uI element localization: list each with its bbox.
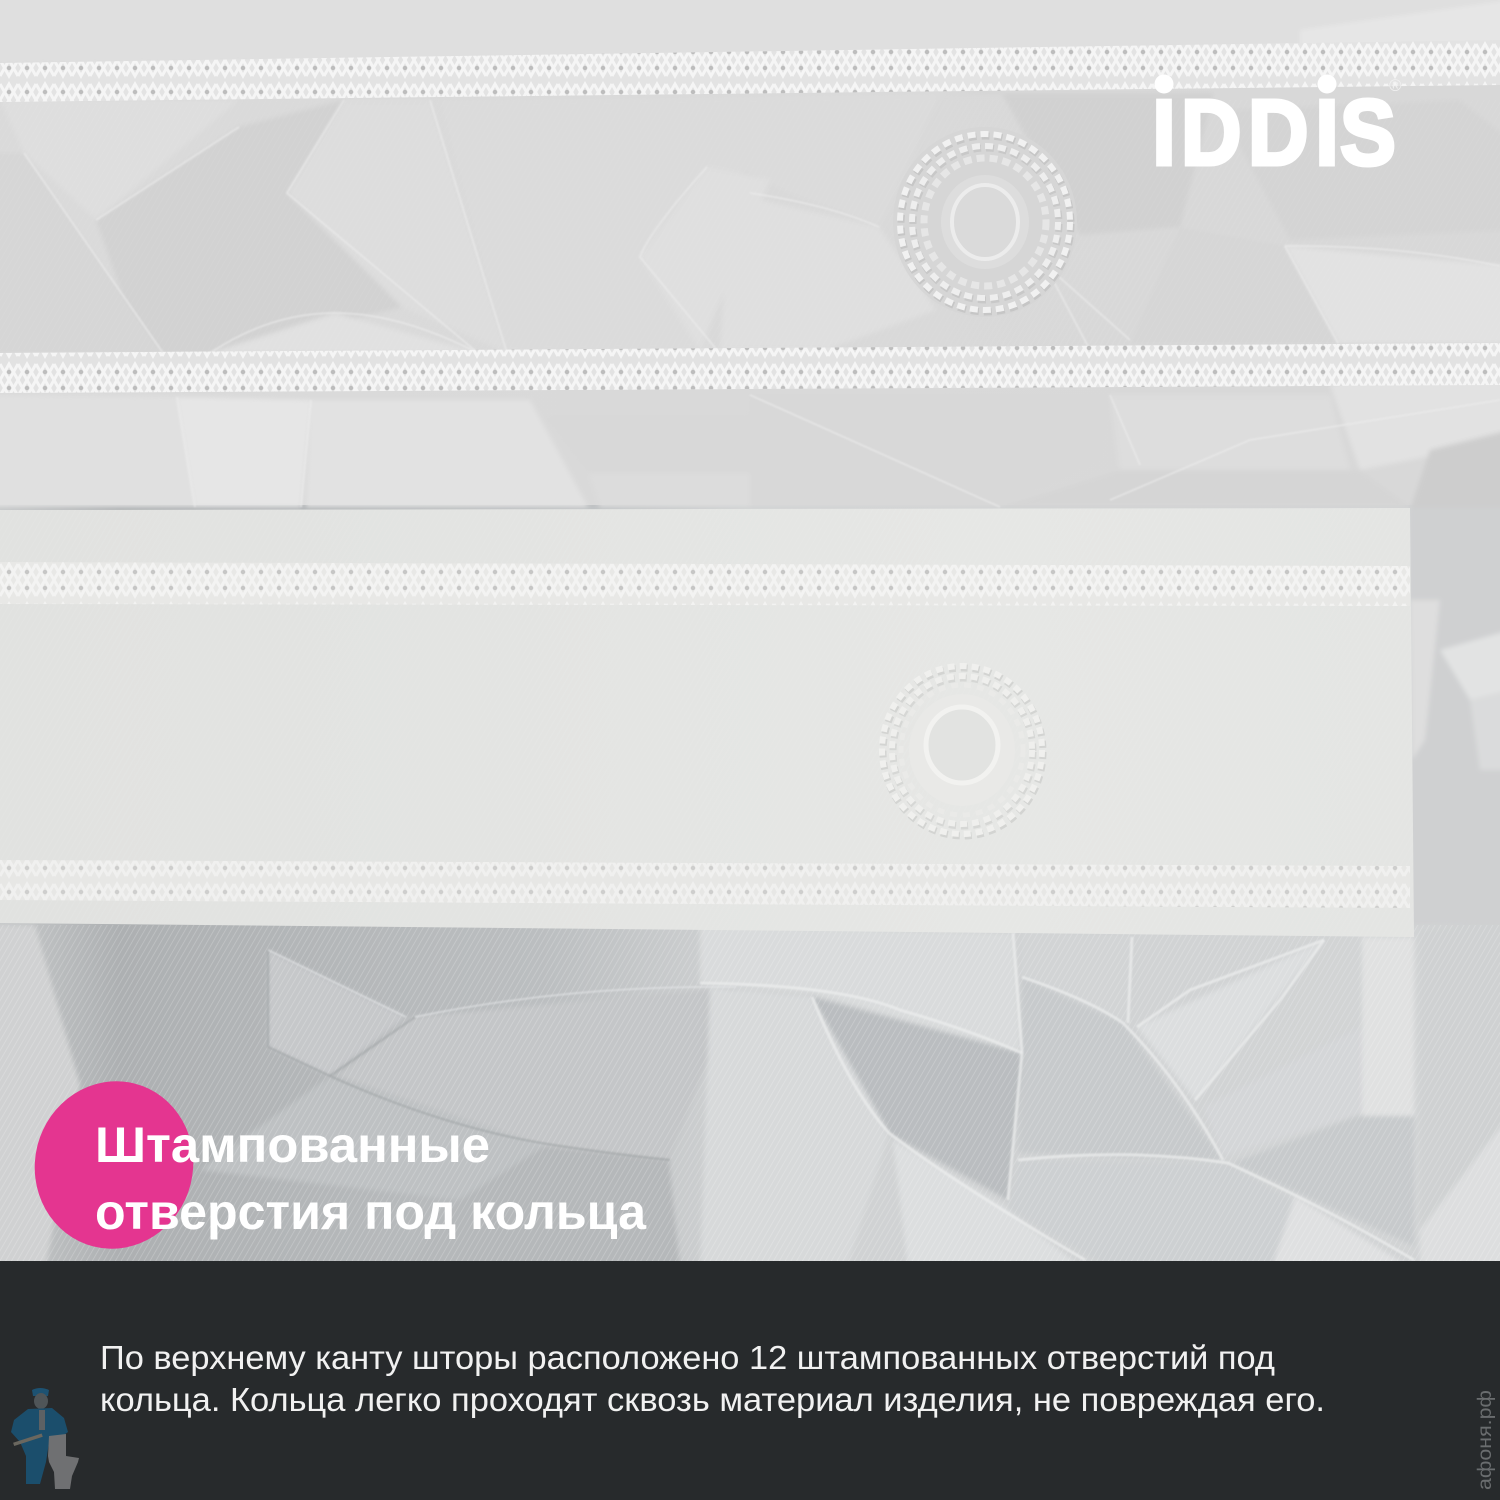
accent: pink ellipse [17, 1064, 211, 1266]
lower strip of upper layer [0, 395, 195, 507]
heading: Штампованные [95, 1117, 490, 1173]
embossed punched ring: hem [882, 666, 1043, 836]
heading [95, 1117, 647, 1240]
logo: IDDIS: ® [1389, 76, 1402, 95]
embossed punched ring: upper [893, 127, 1077, 317]
description text: кольца. Кольца легко проходят сквозь материал изделия, не повреждая его. [100, 1382, 1325, 1419]
description text: По верхнему канту шторы расположено 12 штампованных отверстий под [100, 1340, 1275, 1377]
lower curtain layer facets [0, 925, 80, 1270]
watermark: afonya.rf: афоня.рф [1475, 1390, 1496, 1490]
hem seam: lower [0, 860, 1410, 908]
hem seam: upper [0, 562, 1410, 606]
heading: отверстия под кольца [95, 1184, 647, 1240]
right strip beside the folded hem [1410, 508, 1500, 925]
description text [100, 1340, 1325, 1419]
folded hem panel [0, 508, 1414, 937]
embossed seam: top band [0, 40, 1500, 102]
embossed seam: second band [0, 343, 1500, 393]
footer panel [0, 1261, 1500, 1500]
logo: IDDIS: IDDIS [1152, 80, 1396, 184]
icon: plumber with toilet [11, 1388, 79, 1489]
